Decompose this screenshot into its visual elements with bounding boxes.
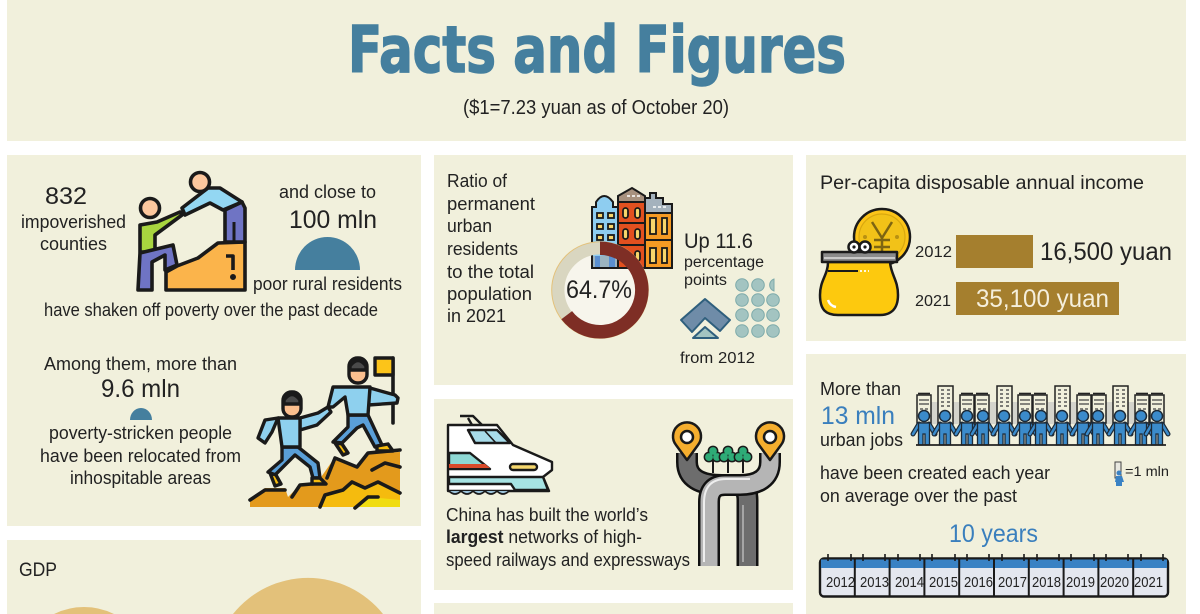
bar: 2012 income [915, 235, 1172, 268]
text: China has built: largest networks of high- [446, 527, 642, 547]
stat: 832 impoverished counties: impoverished [21, 212, 126, 232]
icon: intersecting roads with pins and trees [673, 422, 784, 566]
calendar: 2012 to 2021 [820, 554, 1168, 596]
text: shaken off poverty: have shaken off poverty over the past decade [44, 300, 378, 320]
bar: 2012 income: 16,500 yuan [1040, 238, 1172, 266]
bubble: small GDP [54, 607, 114, 614]
stat: 832 impoverished counties: 832 [45, 183, 87, 210]
heading: per-capita income: Per-capita disposable annual income [820, 172, 1144, 194]
calendar: 2012 to 2021: 2018 [1032, 574, 1061, 591]
panel: GDP [7, 540, 421, 614]
dot grid [736, 279, 779, 337]
panel: urban jobs [806, 354, 1186, 614]
stat: 9.6 mln relocated: have been relocated from [40, 446, 241, 466]
panel: urbanization [434, 155, 793, 385]
icon: purse with yuan coin [820, 209, 910, 315]
stat: close to 100 mln [253, 182, 402, 294]
text: ratio of urban residents: in 2021 [447, 306, 506, 326]
heading: 10 years: 10 years [949, 520, 1038, 548]
stat: 832 impoverished counties: counties [40, 234, 107, 254]
calendar: 2012 to 2021: 2014 [895, 574, 924, 591]
stat: 13 mln urban jobs [820, 379, 903, 450]
stat: up 11.6 percentage points: points [684, 272, 727, 289]
legend: one worker equals 1 mln [1115, 462, 1169, 486]
heading: GDP: GDP [19, 560, 57, 581]
stat: 9.6 mln relocated: inhospitable areas [70, 468, 211, 488]
stat: 13 mln urban jobs: urban jobs [820, 430, 903, 450]
text: ratio of urban residents: population [447, 284, 532, 304]
calendar: 2012 to 2021: 2017 [998, 574, 1027, 591]
calendar: 2012 to 2021: 2020 [1100, 574, 1129, 591]
semicircle: 9.6 mln [130, 408, 152, 420]
subtitle: exchange rate: ($1=7.23 yuan as of October 20) [463, 97, 729, 119]
calendar: 2012 to 2021: 2019 [1066, 574, 1095, 591]
text: China has built: China has built the world’s [446, 505, 648, 525]
calendar: 2012 to 2021: 2015 [929, 574, 958, 591]
stat: close to 100 mln: and close to [279, 182, 376, 202]
panel: income [806, 155, 1186, 341]
text: ratio of urban residents: Ratio of [447, 171, 508, 191]
panel: header [7, 0, 1186, 141]
stat: 832 impoverished counties [21, 183, 126, 254]
bar: 2012 income: 2012 [915, 244, 952, 261]
icon: city buildings [592, 188, 672, 268]
icon: high-speed train [448, 416, 552, 494]
panel: partial bottom middle [434, 603, 793, 614]
stat: up 11.6 percentage points [684, 230, 764, 289]
stat: 13 mln urban jobs: 13 mln [821, 402, 895, 430]
text: created each year [820, 463, 1050, 506]
stat: close to 100 mln: poor rural residents [253, 274, 402, 294]
text: created each year: on average over the past [820, 486, 1017, 506]
text: created each year: have been created each year [820, 463, 1050, 483]
bar: 2021 income: 2021 [915, 293, 951, 310]
stat: close to 100 mln: 100 mln [289, 206, 377, 234]
text: from 2012: from 2012 [680, 350, 755, 367]
stat: 9.6 mln relocated [40, 354, 241, 488]
stat: up 11.6 percentage points: percentage [684, 254, 764, 271]
text: ratio of urban residents: permanent [447, 194, 535, 214]
panel: high-speed networks [434, 399, 793, 590]
text: ratio of urban residents [447, 171, 535, 326]
stat: 9.6 mln relocated: poverty-stricken people [49, 423, 232, 443]
calendar: 2012 to 2021: 2016 [964, 574, 993, 591]
stat: 9.6 mln relocated: Among them, more than [44, 354, 237, 374]
pictogram: 13 workers and city skyline [913, 386, 1168, 445]
chart: donut 64.7%: 64.7% [566, 276, 632, 304]
calendar: 2012 to 2021: 2013 [860, 574, 889, 591]
semicircle: 100 mln [295, 237, 360, 270]
stat: up 11.6 percentage points: Up 11.6 [684, 230, 753, 253]
bubble: large GDP [233, 578, 383, 614]
stat: 9.6 mln relocated: 9.6 mln [101, 375, 180, 403]
legend: one worker equals 1 mln: =1 mln [1125, 463, 1169, 479]
stat: 13 mln urban jobs: More than [820, 379, 901, 399]
calendar: 2012 to 2021: 2012 [826, 574, 855, 591]
chart: donut 64.7% [552, 188, 672, 338]
text: ratio of urban residents: to the total [447, 262, 534, 282]
bar: 2021 income [915, 282, 1119, 315]
text: ratio of urban residents: urban [447, 216, 492, 236]
bar: 2021 income: 35,100 yuan [976, 285, 1109, 313]
icon: upward chevron arrow [681, 299, 730, 338]
text: ratio of urban residents: residents [447, 239, 518, 259]
icon: person helping another climb [138, 172, 245, 290]
text: China has built: speed railways and expressways [446, 550, 690, 570]
title: Facts and Figures [348, 14, 846, 88]
text: China has built [446, 505, 690, 570]
calendar: 2012 to 2021: 2021 [1134, 574, 1163, 591]
panel: poverty alleviation [7, 155, 421, 526]
icon: climbers on a mountain [250, 358, 400, 508]
